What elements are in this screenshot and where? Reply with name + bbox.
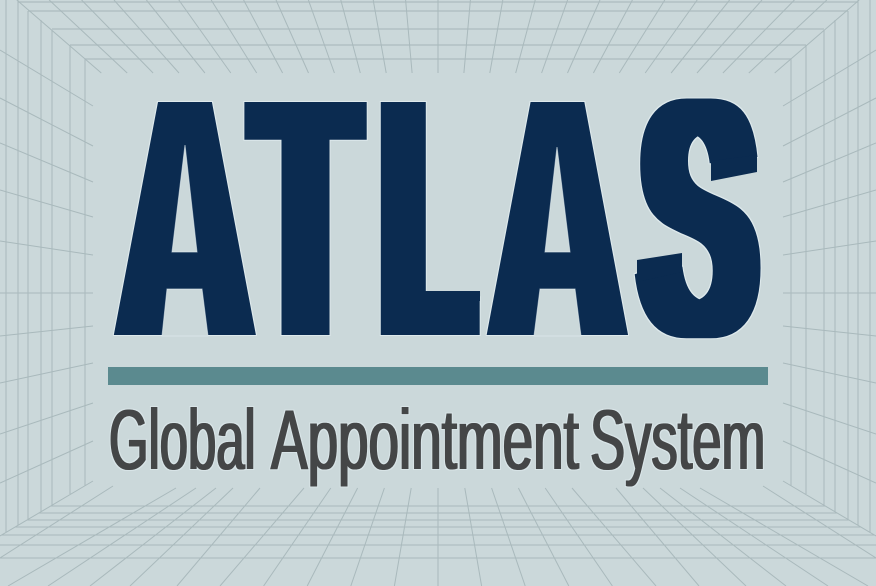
perspective grid: ceiling [17,0,859,73]
perspective grid: floor [0,486,876,586]
title letter interior shaping [162,145,757,336]
divider bar [108,367,768,385]
subtitle: Appointment [271,393,579,488]
perspective grid: left wall [0,0,93,536]
subtitle: System [590,392,765,487]
title: ATLAS: A [494,30,621,408]
title: ATLAS: S [642,28,755,407]
subtitle: Global [109,393,256,487]
title: ATLAS: T [254,28,357,407]
title: ATLAS [121,28,755,408]
title: ATLAS: L [383,30,472,408]
perspective grid: right wall [783,0,876,536]
title: ATLAS: A [121,30,249,408]
subtitle [109,392,765,488]
